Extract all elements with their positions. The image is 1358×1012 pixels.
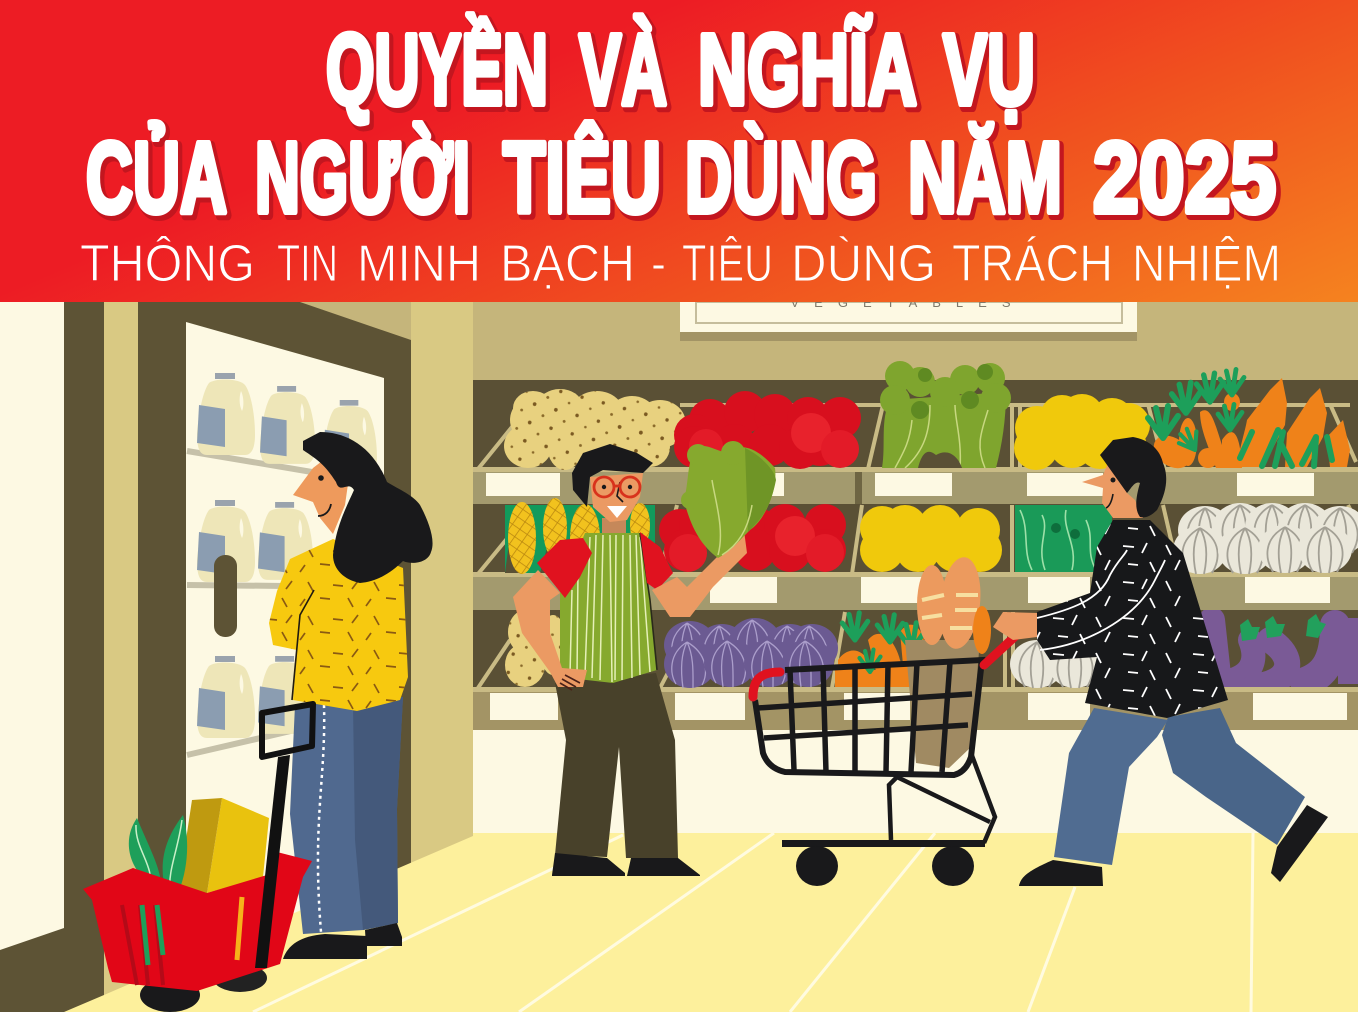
sweater (269, 539, 408, 711)
produce: green leaves (1015, 505, 1112, 572)
title line 2 (86, 122, 1276, 234)
man pushing cart (993, 437, 1328, 886)
cart pull handle (262, 704, 313, 757)
shelf row 3 (473, 687, 1358, 730)
woman shopper (269, 432, 433, 959)
header banner (0, 0, 1358, 302)
shoes (283, 923, 402, 959)
wall pillar (0, 302, 473, 1012)
title line 1 shadow: NGHĨA (701, 17, 920, 129)
produce: eggplants (1212, 614, 1352, 686)
left sleeve (537, 538, 592, 598)
produce: tomatoes middle row (659, 504, 846, 572)
hair (303, 432, 433, 583)
face (293, 455, 350, 534)
fridge glass with shelves and jugs (186, 322, 384, 960)
hair (572, 444, 653, 507)
subtitle: - (651, 235, 666, 293)
back leg (1162, 708, 1305, 845)
sweater (1037, 520, 1228, 718)
box (207, 798, 269, 893)
produce: potatoes bottom row (505, 608, 567, 687)
store sign (680, 295, 1137, 341)
hand (993, 612, 1037, 640)
price labels (486, 473, 1347, 720)
produce: corn (505, 498, 655, 574)
wheels (796, 846, 838, 886)
title line 2 shadow: NĂM (911, 125, 1065, 237)
title line 1: QUYỀN (326, 14, 548, 126)
title line 1 shadow: VÀ (582, 17, 670, 129)
shelf row 2 (473, 572, 1358, 610)
glasses (594, 477, 640, 497)
shoes (1019, 805, 1328, 886)
trousers (555, 673, 678, 858)
red basket body (83, 852, 312, 991)
title line 1 shadow: VỤ (946, 17, 1038, 129)
title line 1 (326, 14, 1035, 126)
right arm (652, 523, 747, 617)
floor tile lines (253, 833, 1253, 1012)
title line 1: VÀ (579, 14, 667, 126)
cart frame (889, 753, 995, 843)
subtitle: TIÊU (682, 235, 773, 293)
produce: white onions middle row (1173, 503, 1358, 574)
title line 2: CỦA (86, 122, 227, 234)
front leg (1054, 708, 1168, 865)
title line 2 shadow: CỦA (89, 125, 230, 237)
title line 2: NGƯỜI (255, 122, 470, 234)
title line 2 shadow: 2025 (1096, 125, 1279, 237)
title line 2 shadow: TIÊU (506, 125, 664, 237)
vest (560, 533, 657, 683)
hair (1100, 437, 1166, 517)
title line 2: NĂM (908, 122, 1062, 234)
basket with groceries (83, 704, 313, 1012)
subtitle: DÙNG (791, 235, 936, 293)
title line 2: DÙNG (685, 122, 877, 234)
produce: yellow fruit middle row (860, 505, 1002, 572)
produce: carrots bottom row (835, 613, 930, 687)
produce shelves (473, 380, 1358, 730)
subtitle (80, 235, 1281, 293)
greens (129, 815, 187, 893)
produce: white onions bottom row (1010, 640, 1102, 688)
bag (905, 640, 980, 768)
store sign: VEGETABLES (790, 295, 1026, 310)
red handles (753, 630, 1022, 697)
title line 2 shadow (89, 125, 1279, 237)
lower cream wall (473, 725, 1358, 840)
produce: yellow fruit top row (1014, 394, 1150, 470)
produce: lettuce top row (880, 361, 1011, 468)
title line 2 shadow: NGƯỜI (258, 125, 473, 237)
left arm (513, 570, 587, 687)
face (1082, 463, 1143, 518)
subtitle: TIN (277, 235, 338, 293)
right sleeve (640, 532, 673, 590)
baguettes (917, 565, 947, 645)
produce: potatoes top row (504, 389, 686, 470)
subtitle: NHIỆM (1132, 235, 1281, 293)
subtitle: THÔNG (80, 235, 255, 293)
produce: tomatoes top row (674, 391, 861, 469)
title line 2 shadow: DÙNG (688, 125, 880, 237)
subtitle: MINH (357, 235, 481, 293)
lettuce (681, 441, 776, 558)
back wall (0, 302, 1358, 1012)
left cream wall (0, 302, 64, 962)
subtitle: TRÁCH (952, 235, 1113, 293)
floor (64, 833, 1358, 1012)
wheels (213, 964, 267, 992)
crate frames (478, 404, 1358, 688)
shelves (187, 451, 312, 755)
title line 1: VỤ (943, 14, 1035, 126)
produce: carrots top row (1148, 369, 1350, 475)
neck (602, 518, 626, 533)
fridge door frame (138, 302, 411, 1000)
title line 1: NGHĨA (698, 14, 917, 126)
produce: purple cabbage (664, 618, 838, 688)
wire basket (755, 660, 982, 775)
face (590, 473, 643, 522)
jeans (290, 697, 403, 934)
shopping cart (753, 555, 1022, 886)
title line 1 shadow: QUYỀN (329, 17, 551, 129)
man with lettuce (513, 441, 776, 876)
subtitle: BẠCH (500, 235, 635, 293)
shelf row 1 (473, 467, 1358, 504)
title line 1 shadow (329, 17, 1038, 129)
title line 2: 2025 (1093, 122, 1276, 234)
shoes (552, 853, 700, 876)
title line 2: TIÊU (503, 122, 661, 234)
